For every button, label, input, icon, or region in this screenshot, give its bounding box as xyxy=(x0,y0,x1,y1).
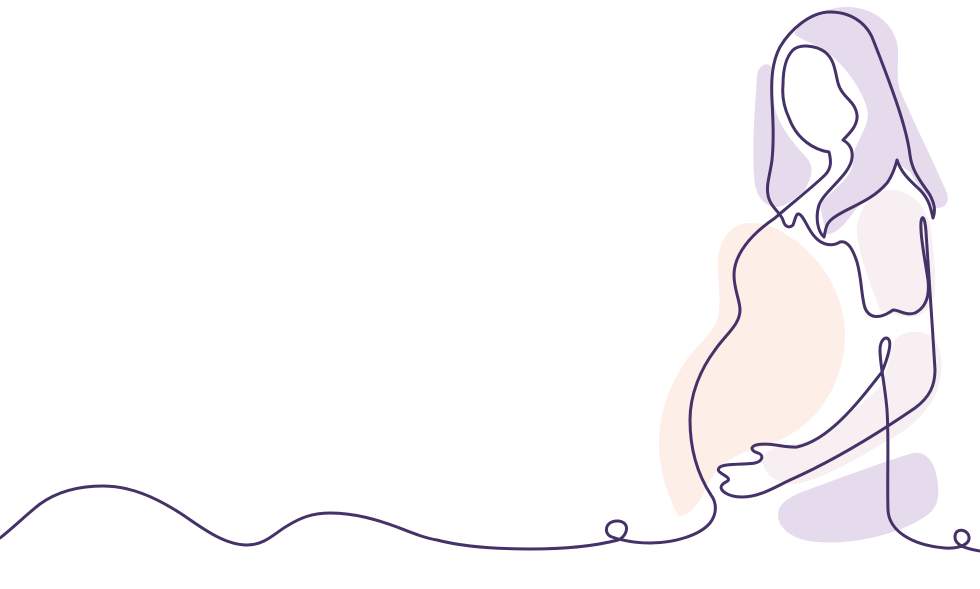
blob: hair left xyxy=(753,64,812,207)
blob: belly peach xyxy=(659,223,845,516)
blob: ground shadow xyxy=(778,453,938,542)
blob: upper arm pale xyxy=(857,190,935,317)
blob: hair main xyxy=(794,7,948,234)
blob: forearm pale xyxy=(763,332,942,484)
